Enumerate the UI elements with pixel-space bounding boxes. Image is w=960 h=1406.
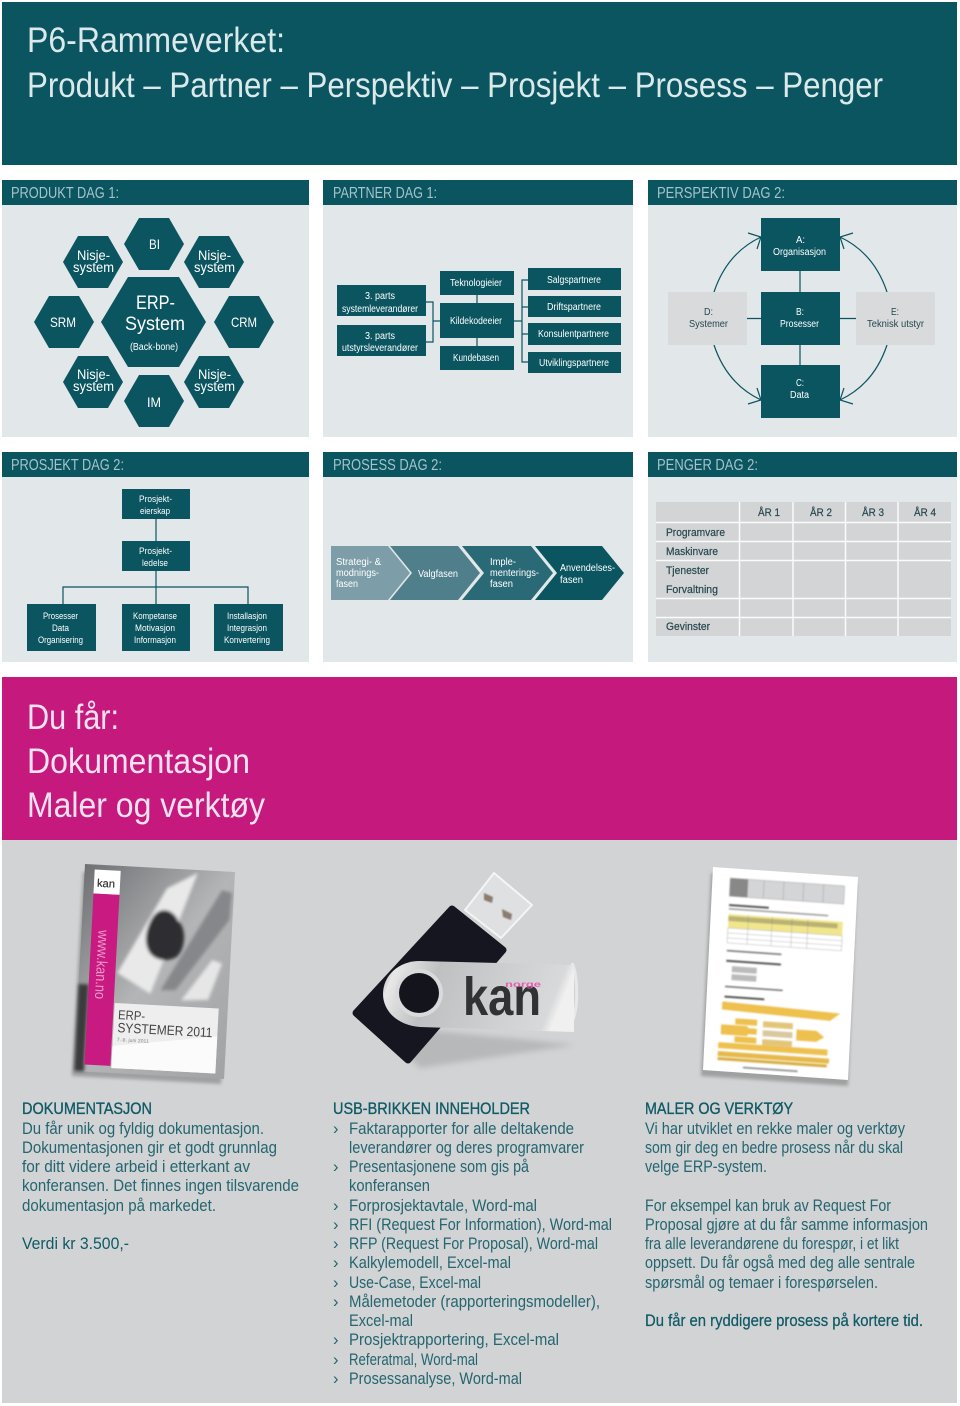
text column: usb-brikken: › — [333, 1370, 338, 1388]
partner diagram: Driftspartnere — [547, 302, 601, 313]
panel: penger — [648, 452, 957, 662]
text column: usb-brikken: Referatmal, Word-mal — [349, 1351, 478, 1369]
table: ÅR 1 — [758, 506, 780, 519]
org chart: Installasjon — [227, 611, 267, 621]
perspektiv diagram with arrows: Prosesser — [780, 319, 820, 330]
text column: usb-brikken: RFI (Request For Information), Word-mal — [349, 1216, 612, 1234]
perspektiv diagram with arrows: Systemer — [689, 319, 729, 330]
partner diagram: 3. parts — [365, 291, 395, 302]
image: booklet — [72, 864, 235, 1084]
text column: dokumentasjon: dokumentasjon på markedet. — [22, 1197, 216, 1215]
text column: dokumentasjon: konferansen. Det finnes ingen tilsvarende — [22, 1177, 299, 1195]
image: usb stick: kan — [463, 967, 541, 1027]
text column: dokumentasjon: for ditt videre arbeid i etterkant av — [22, 1158, 251, 1176]
hexagon diagram: System — [125, 314, 185, 335]
org chart: Data — [52, 623, 69, 633]
title text: Produkt – Partner – Perspektiv – Prosjekt – Prosess – Penger — [27, 66, 883, 105]
panel: prosess — [323, 452, 633, 662]
hexagon diagram: system — [73, 378, 114, 394]
text column: usb-brikken: Presentasjonene som gis på — [349, 1158, 530, 1176]
text column: usb-brikken: konferansen — [349, 1177, 430, 1195]
perspektiv diagram with arrows: A: — [796, 235, 805, 246]
hexagon diagram: Nisje- — [198, 247, 231, 263]
hexagon diagram: Nisje- — [77, 247, 110, 263]
image: booklet: 7.-8. juni 2011 — [117, 1037, 149, 1045]
chevron process: Strategi- & — [336, 557, 381, 568]
text column: usb-brikken: › — [333, 1274, 338, 1292]
text column: maler og verktøy: Proposal gjøre at du får samme informasjon — [645, 1216, 928, 1234]
partner diagram: Utviklingspartnere — [539, 358, 609, 369]
org chart: Informasjon — [134, 635, 176, 645]
text column: usb-brikken: Excel-mal — [349, 1312, 413, 1330]
text column: usb-brikken: Forprosjektavtale, Word-mal — [349, 1197, 537, 1215]
text column: maler og verktøy: spørsmål og temaer i forespørselen. — [645, 1274, 878, 1292]
org chart: Kompetanse — [133, 611, 177, 621]
chevron process — [331, 546, 624, 600]
text column: maler og verktøy: MALER OG VERKTØY — [645, 1099, 793, 1118]
org chart: Konvertering — [224, 635, 270, 645]
partner diagram: Salgspartnere — [547, 275, 601, 286]
perspektiv diagram with arrows: Teknisk utstyr — [867, 319, 925, 330]
chevron process: fasen — [560, 575, 583, 586]
text column: usb-brikken: USB-BRIKKEN INNEHOLDER — [333, 1099, 530, 1118]
text column: usb-brikken: › — [333, 1331, 338, 1349]
panel: penger: PENGER DAG 2: — [657, 457, 758, 474]
table: Gevinster — [666, 621, 710, 633]
hexagon diagram: (Back-bone) — [130, 342, 178, 353]
magenta band: du får — [2, 677, 957, 840]
hexagon diagram — [34, 218, 274, 427]
panel: prosjekt — [2, 452, 309, 662]
chevron process: Anvendelses- — [560, 563, 615, 574]
text column: maler og verktøy: Vi har utviklet en rekke maler og verktøy — [645, 1120, 906, 1138]
text column: maler og verktøy: fra alle leverandørene du forespør, i et likt — [645, 1235, 899, 1253]
org chart: Prosjekt- — [139, 494, 172, 504]
partner diagram: Kildekodeeier — [450, 316, 503, 327]
hexagon diagram: IM — [147, 394, 161, 410]
panel: partner — [323, 180, 633, 437]
text column: dokumentasjon: Du får unik og fyldig dokumentasjon. — [22, 1120, 264, 1138]
title text — [27, 21, 883, 105]
org chart: Integrasjon — [227, 623, 267, 633]
image: booklet: SYSTEMER 2011 — [117, 1020, 213, 1040]
text column: maler og verktøy — [645, 1099, 928, 1330]
panel: partner: PARTNER DAG 1: — [333, 185, 437, 202]
partner diagram: Teknologieier — [450, 278, 503, 289]
partner diagram — [337, 268, 621, 373]
perspektiv diagram with arrows: B: — [796, 307, 804, 318]
image: booklet: ERP- — [118, 1007, 146, 1024]
text column: dokumentasjon: DOKUMENTASJON — [22, 1099, 152, 1118]
text column: usb-brikken: › — [333, 1351, 338, 1369]
text column: usb-brikken: Prosjektrapportering, Excel-mal — [349, 1331, 559, 1349]
hexagon diagram: ERP- — [136, 293, 175, 314]
text column: usb-brikken: Faktarapporter for alle deltakende — [349, 1120, 574, 1138]
text column: usb-brikken: leverandører og deres programvarer — [349, 1139, 584, 1157]
text column: usb-brikken: › — [333, 1235, 338, 1253]
magenta band: du får: Du får: — [27, 698, 119, 737]
text column: usb-brikken: › — [333, 1158, 338, 1176]
perspektiv diagram with arrows: Organisasjon — [773, 247, 826, 258]
chevron process: menterings- — [490, 568, 539, 579]
panel: perspektiv — [648, 180, 957, 437]
hexagon diagram: system — [73, 259, 114, 275]
table: Programvare — [666, 527, 725, 539]
panel: produkt — [2, 180, 309, 437]
chevron process: fasen — [490, 579, 513, 590]
hexagon diagram: system — [194, 259, 235, 275]
price: Verdi kr 3.500,- — [22, 1235, 129, 1253]
hexagon diagram: system — [194, 378, 235, 394]
conclusion: Du får en ryddigere prosess på kortere tid. — [645, 1312, 923, 1330]
partner diagram: 3. parts — [365, 331, 395, 342]
org chart: Prosjekt- — [139, 546, 172, 556]
title text: P6-Rammeverket: — [27, 21, 285, 60]
text column: maler og verktøy: For eksempel kan bruk av Request For — [645, 1197, 891, 1215]
magenta band: du får: Dokumentasjon — [27, 742, 250, 781]
partner diagram: Konsulentpartnere — [538, 329, 609, 340]
table: Tjenester — [666, 565, 709, 577]
panel: prosjekt: PROSJEKT DAG 2: — [11, 457, 124, 474]
panel: produkt: PRODUKT DAG 1: — [11, 185, 119, 202]
table: ÅR 2 — [810, 506, 832, 519]
text column: usb-brikken: Kalkylemodell, Excel-mal — [349, 1254, 511, 1272]
chevron process: Imple- — [490, 557, 516, 568]
magenta band: du får: Maler og verktøy — [27, 786, 265, 825]
org chart: Organisering — [38, 635, 83, 645]
org chart: eierskap — [140, 506, 170, 516]
table: Maskinvare — [666, 546, 718, 558]
text column: dokumentasjon: Dokumentasjonen gir et godt grunnlag — [22, 1139, 277, 1157]
org chart: Prosesser — [43, 611, 78, 621]
text column: usb-brikken: › — [333, 1197, 338, 1215]
table — [656, 502, 951, 636]
text column: usb-brikken: Use-Case, Excel-mal — [349, 1274, 481, 1292]
partner diagram: Kundebasen — [453, 353, 499, 364]
panel: perspektiv: PERSPEKTIV DAG 2: — [657, 185, 785, 202]
table: ÅR 3 — [862, 506, 884, 519]
text column: maler og verktøy: velge ERP-system. — [645, 1158, 767, 1176]
image: usb stick: norge — [505, 980, 542, 989]
table: ÅR 4 — [914, 506, 936, 519]
hexagon diagram: SRM — [50, 314, 76, 330]
table: Forvaltning — [666, 584, 718, 596]
text column: usb-brikken: › — [333, 1216, 338, 1234]
hexagon diagram: Nisje- — [77, 366, 110, 382]
text column: usb-brikken: › — [333, 1254, 338, 1272]
text column: usb-brikken: Prosessanalyse, Word-mal — [349, 1370, 522, 1388]
panel: prosess: PROSESS DAG 2: — [333, 457, 442, 474]
image: document template — [701, 867, 858, 1086]
hexagon diagram: CRM — [231, 314, 257, 330]
chevron process: fasen — [336, 579, 358, 590]
perspektiv diagram with arrows: E: — [891, 307, 899, 318]
partner diagram: utstyrsleverandører — [342, 343, 419, 354]
org chart: Motivasjon — [135, 623, 175, 633]
org chart: ledelse — [142, 558, 168, 568]
text column: usb-brikken: Målemetoder (rapporteringsmodeller), — [349, 1293, 600, 1311]
text column: maler og verktøy: som gir deg en bedre prosess når du skal — [645, 1139, 903, 1157]
chevron process: Valgfasen — [418, 569, 458, 580]
text column: usb-brikken: › — [333, 1293, 338, 1311]
perspektiv diagram with arrows: D: — [704, 307, 713, 318]
image: booklet: www.kan.no — [91, 929, 112, 1000]
hexagon diagram: Nisje- — [198, 366, 231, 382]
org chart — [27, 489, 283, 651]
text column: usb-brikken — [333, 1099, 612, 1388]
text column: usb-brikken: › — [333, 1120, 338, 1138]
perspektiv diagram with arrows: C: — [796, 378, 804, 389]
image: usb stick — [356, 873, 577, 1068]
hexagon diagram: BI — [149, 236, 160, 252]
header band: title — [2, 2, 957, 165]
partner diagram: systemleverandører — [342, 304, 419, 315]
bottom gray panel — [2, 840, 957, 1403]
perspektiv diagram with arrows: Data — [790, 390, 809, 401]
perspektiv diagram with arrows — [668, 218, 935, 418]
text column: maler og verktøy: oppsett. Du får også med deg alle sentrale — [645, 1254, 915, 1272]
text column: usb-brikken: RFP (Request For Proposal), Word-mal — [349, 1235, 598, 1253]
chevron process: modnings- — [336, 568, 379, 579]
text column: dokumentasjon — [22, 1099, 299, 1253]
image: booklet: kan — [97, 878, 115, 891]
